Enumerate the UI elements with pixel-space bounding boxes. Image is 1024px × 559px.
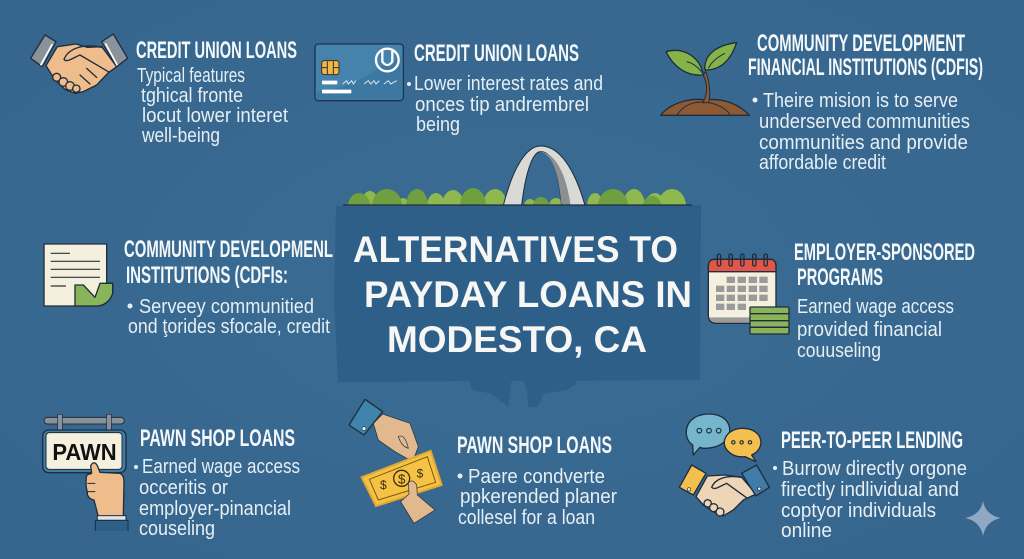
icon: hands exchanging money: $: [380, 478, 387, 492]
panel: community development institutions (document): [44, 236, 333, 338]
body text: collesel for a loan: [458, 507, 595, 529]
body text: tghical fronte: [141, 85, 243, 107]
icon: hands exchanging money: $: [398, 471, 406, 486]
body text: [797, 296, 954, 362]
body text: firectly indlividual and: [781, 479, 959, 501]
icon: document: [44, 244, 113, 306]
body text: Serveey communitied: [139, 296, 314, 318]
bridge silhouette below title: [470, 361, 577, 407]
icon: sprout: [661, 43, 749, 115]
body text: Paere condverte: [468, 466, 605, 488]
body text: Typical features: [137, 65, 245, 87]
body text: provided financial: [797, 319, 942, 341]
title text: [353, 229, 692, 360]
icon: hands exchanging money: $: [417, 466, 424, 480]
title text: MODESTO, CA: [387, 319, 647, 360]
body text: communities and provide: [759, 132, 968, 154]
icon: chat bubbles and handshake: [679, 414, 769, 516]
body text: online: [781, 520, 832, 542]
icon: handshake: [31, 34, 128, 93]
body text: [134, 456, 300, 540]
heading: CREDIT UNION LOANS: [136, 37, 297, 64]
heading: PROGRAMS: [797, 264, 883, 291]
title text: ALTERNATIVES TO: [353, 229, 678, 270]
body text: ond ţorides sfocale, credit: [128, 316, 330, 338]
heading: [794, 239, 975, 291]
title panel: [334, 205, 701, 382]
icon: calendar and money stack: [708, 254, 789, 334]
panel: pawn shop loans (sign): [43, 414, 300, 540]
icon: pawn sign held by hand: [43, 414, 128, 531]
body text: Theire mision is to serve: [763, 90, 958, 112]
body text: Earned wage access: [142, 456, 300, 478]
body text: locut lower interet: [142, 105, 288, 127]
panel: peer-to-peer lending: [679, 414, 967, 542]
body text: [752, 90, 970, 174]
body text: ppkerended planer: [460, 486, 617, 508]
icon: pawn sign held by hand: PAWN: [52, 439, 117, 465]
arch: [503, 146, 585, 205]
body text: [773, 458, 967, 542]
body text: Lower interest rates and: [414, 73, 603, 95]
body text: [128, 296, 330, 338]
panel: credit union loans (handshake): [31, 34, 297, 147]
title text: PAYDAY LOANS IN: [364, 274, 692, 315]
body text: [407, 73, 603, 136]
body text: couseling: [139, 518, 215, 540]
central landmark: skyline with arch and trees: [348, 146, 686, 204]
body text: underserved communities: [759, 111, 970, 133]
icon: credit card: [315, 44, 403, 101]
heading: [124, 236, 333, 289]
body text: onces tip andrembrel: [415, 94, 589, 116]
heading: COMMUNITY DEVELOPMENL: [124, 236, 333, 263]
body text: employer-pinancial: [139, 498, 291, 520]
icon: sparkle watermark: [965, 501, 1001, 536]
body text: affordable credit: [759, 152, 886, 174]
body text: coptyor individuals: [781, 500, 936, 522]
heading: [748, 30, 983, 81]
heading: PAWN SHOP LOANS: [140, 425, 295, 452]
panel: credit union loans (card): [315, 40, 603, 136]
body text: occeritis or: [139, 477, 228, 499]
body text: couuseling: [797, 340, 881, 362]
body text: [458, 466, 617, 529]
panel: CDFIs (sprout): [661, 30, 983, 174]
icon: hands exchanging money: [349, 399, 442, 523]
body text: Burrow directly orgone: [782, 458, 967, 480]
heading: CREDIT UNION LOANS: [414, 40, 579, 67]
heading: INSTITUTIONS (CDFIs:: [126, 262, 288, 289]
trees: [348, 188, 686, 204]
body text: Earned wage access: [797, 296, 954, 318]
heading: PAWN SHOP LOANS: [457, 432, 612, 459]
body text: well-being: [141, 125, 220, 147]
body text: [137, 65, 288, 147]
panel: employer-sponsored programs: [708, 239, 975, 362]
body text: being: [416, 114, 460, 136]
panel: pawn shop loans (cash): [349, 399, 617, 529]
